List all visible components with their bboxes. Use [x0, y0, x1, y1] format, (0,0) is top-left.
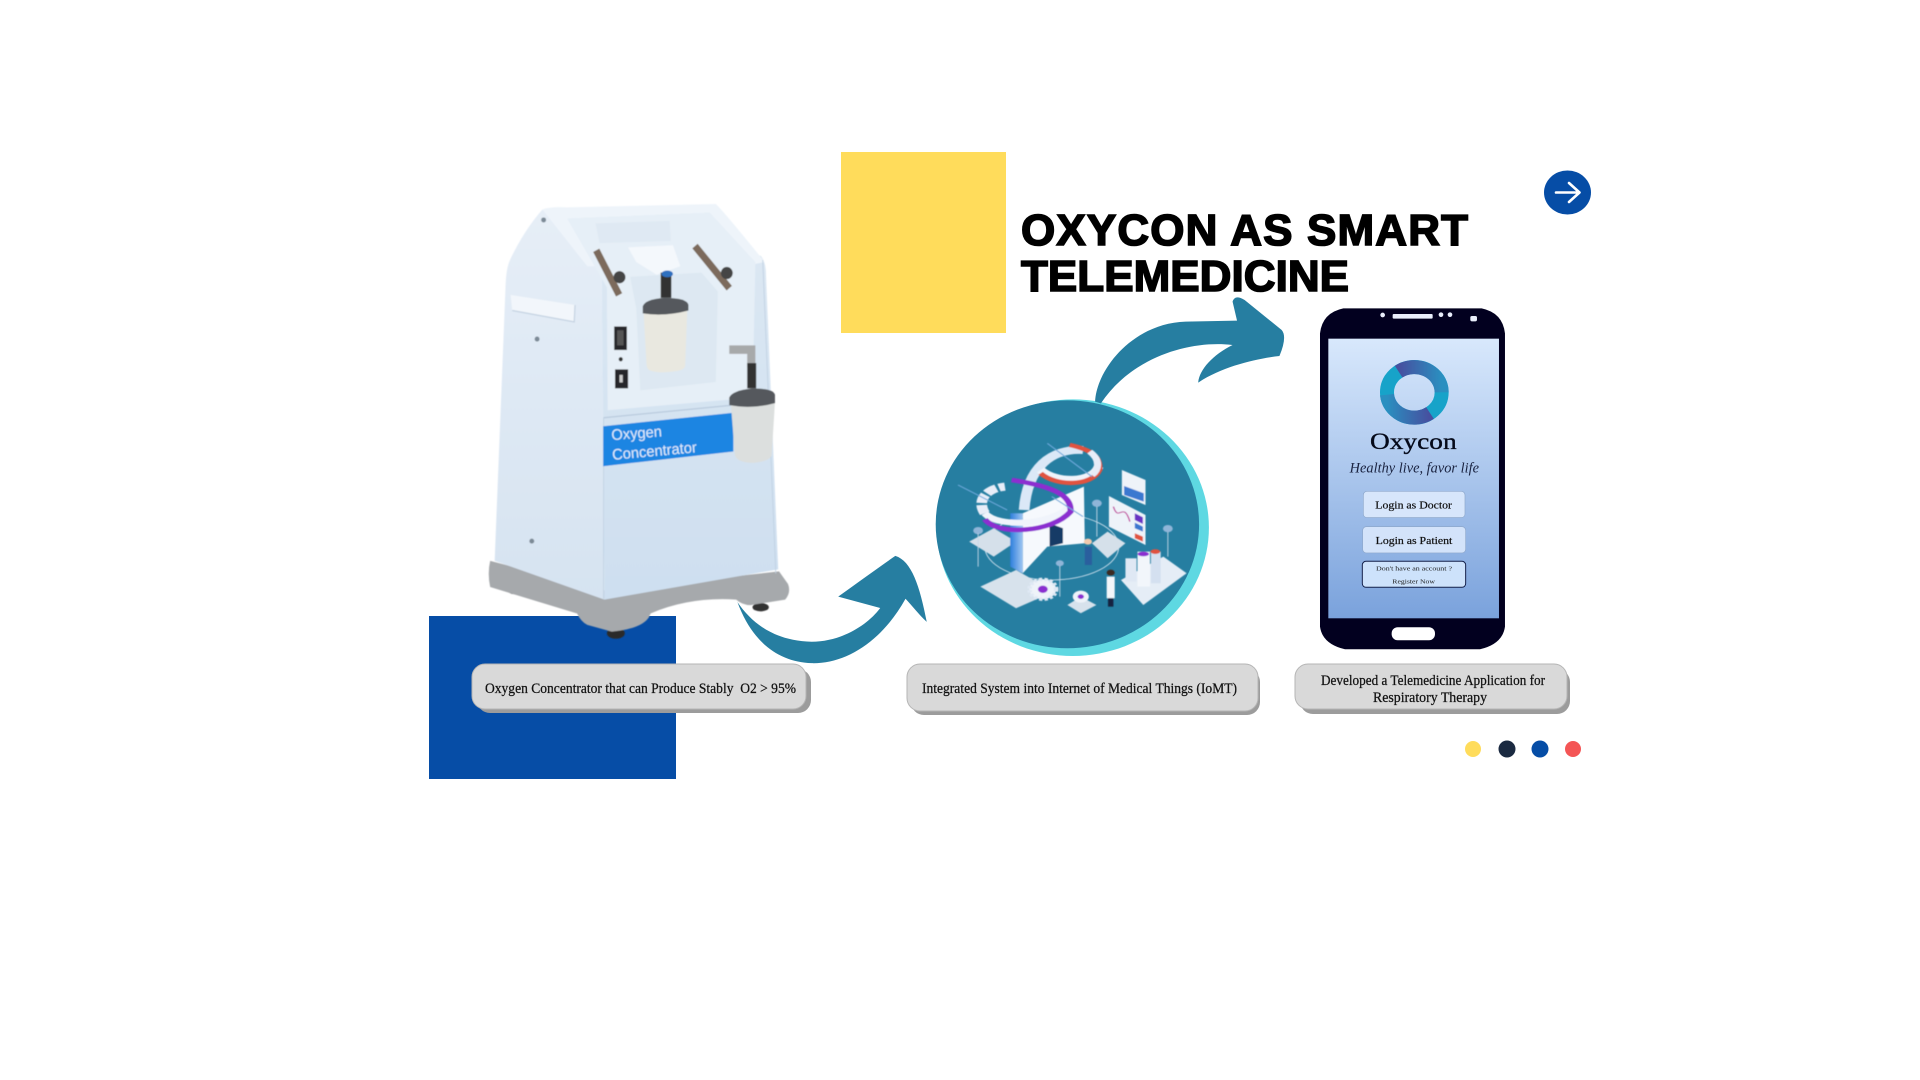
phone screen	[1328, 339, 1499, 618]
iot illustration	[958, 443, 1187, 613]
cup recess	[630, 273, 718, 390]
arrow: concentrator to IoMT	[737, 556, 927, 663]
device base	[489, 561, 789, 639]
device label	[603, 413, 733, 466]
outlet bottle	[729, 363, 775, 463]
caption: oxygen concentrator: Oxygen Concentrator that can Produce Stably O2 > 95%	[485, 681, 796, 697]
button: login as patient	[1363, 527, 1466, 553]
caption: telemedicine app: Respiratory Therapy	[1373, 690, 1488, 706]
teal disc	[936, 400, 1199, 648]
device label: Concentrator	[611, 439, 697, 464]
caption: telemedicine app	[1295, 664, 1570, 714]
icon: next arrow button	[1544, 170, 1591, 214]
caption: oxygen concentrator	[472, 664, 811, 713]
oxycon logo	[1387, 367, 1442, 418]
button: register: Don't have an account ?	[1376, 565, 1452, 572]
flow connector	[729, 350, 751, 367]
device front panel	[602, 256, 778, 600]
humidifier cup	[643, 270, 688, 372]
caption: IoMT: Integrated System into Internet of Medical Things (IoMT)	[922, 681, 1237, 697]
phone home button	[1392, 627, 1435, 640]
phone top sensors	[1380, 312, 1477, 321]
phone mockup	[1320, 308, 1505, 649]
button: login as doctor	[1363, 491, 1465, 518]
handle recess	[511, 295, 575, 322]
device roof	[542, 204, 765, 266]
app tagline: Healthy live, favor life	[1349, 461, 1479, 477]
hoses and dials	[596, 246, 729, 295]
device label: Oxygen	[611, 423, 662, 444]
button: register	[1362, 561, 1466, 587]
front seam	[604, 402, 767, 418]
button: login as doctor: Login as Doctor	[1375, 501, 1453, 512]
button: login as patient: Login as Patient	[1376, 536, 1453, 547]
button: register: Register Now	[1392, 579, 1435, 586]
blue square	[429, 616, 676, 779]
caption: IoMT	[907, 664, 1260, 715]
app name: Oxycon	[1370, 429, 1457, 455]
color dots	[1465, 740, 1581, 758]
phone body	[1320, 308, 1505, 649]
device side panel	[495, 209, 604, 600]
screws	[529, 217, 546, 544]
arrow: IoMT to phone	[1095, 297, 1284, 403]
caption: telemedicine app: Developed a Telemedicine Application for	[1321, 673, 1545, 689]
cyan crescent	[937, 399, 1209, 656]
title: OXYCON AS SMART	[1021, 206, 1468, 255]
control switches	[614, 326, 628, 388]
title	[1021, 206, 1468, 301]
panel: IoMT circle	[936, 399, 1209, 656]
oxygen concentrator device	[489, 204, 789, 639]
yellow square	[841, 152, 1006, 333]
title: TELEMEDICINE	[1021, 252, 1349, 301]
